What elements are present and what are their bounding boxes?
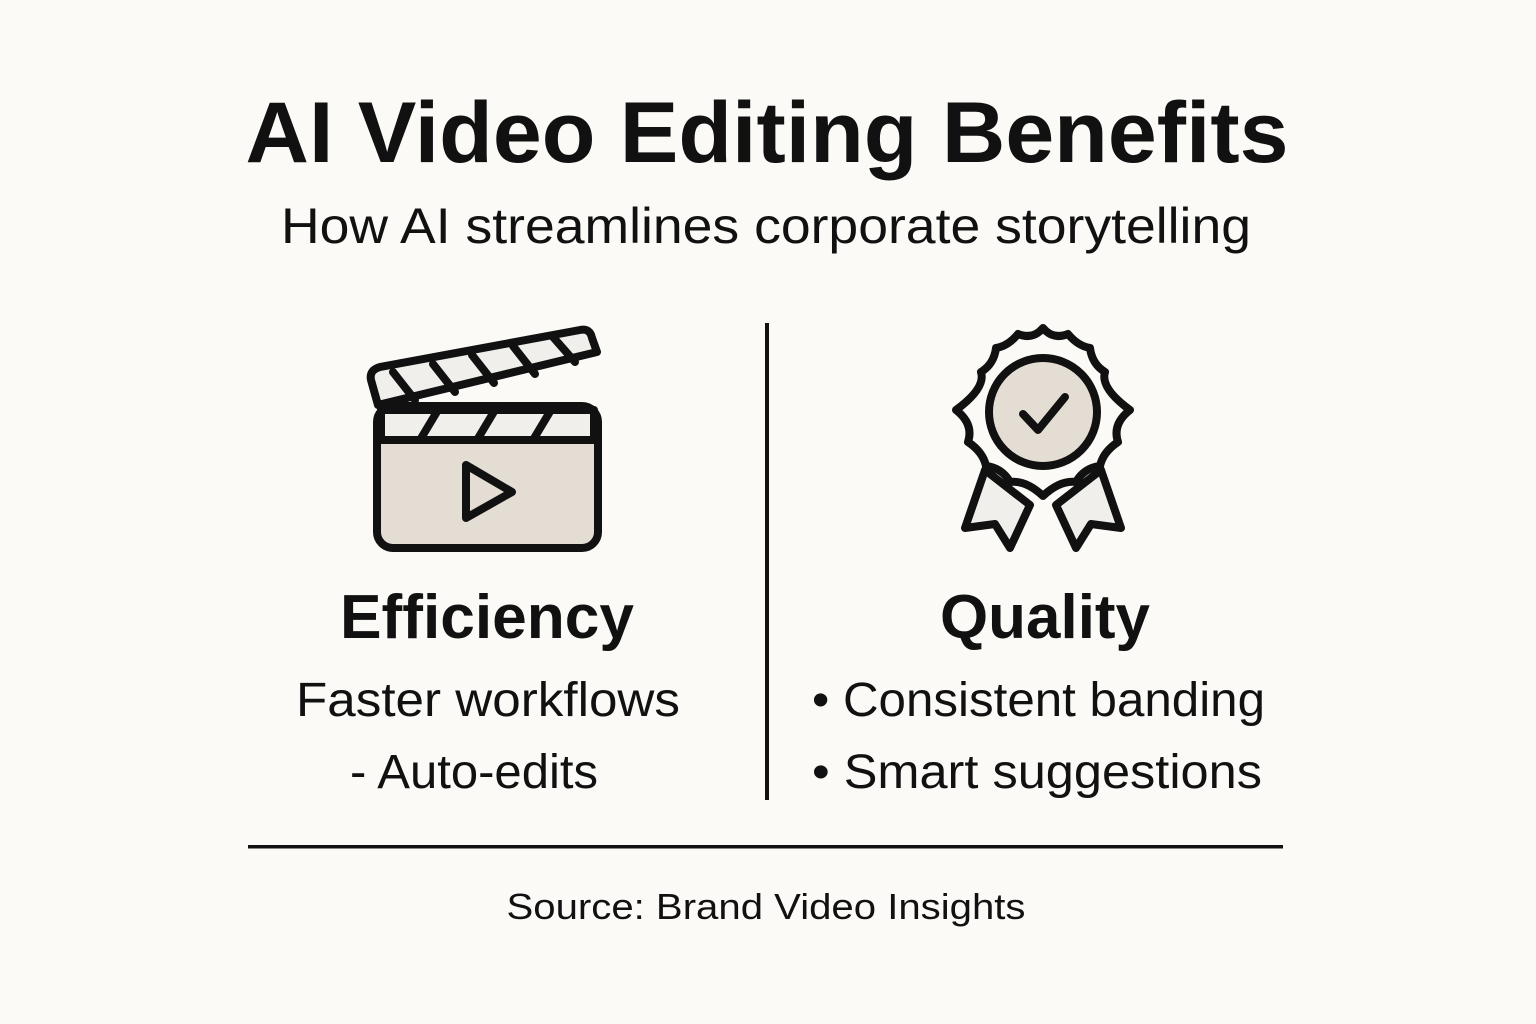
title: AI Video Editing Benefits	[246, 85, 1288, 181]
source: Source: Brand Video Insights	[506, 886, 1026, 927]
subtitle: How AI streamlines corporate storytelling	[281, 198, 1251, 254]
icon: clapperboard	[371, 330, 598, 548]
text: quality items	[812, 674, 1265, 799]
heading: Efficiency: Efficiency	[340, 583, 635, 652]
text: efficiency items: Faster workflows	[296, 674, 680, 727]
text: quality items: • Smart suggestions	[812, 746, 1262, 799]
divider: vertical	[765, 323, 769, 800]
text: quality items: • Consistent banding	[812, 674, 1265, 727]
icon: award badge	[956, 328, 1130, 548]
text: efficiency items: - Auto-edits	[350, 746, 598, 799]
heading: Quality: Quality	[940, 583, 1151, 652]
text: efficiency items	[296, 674, 680, 799]
divider: horizontal	[248, 845, 1283, 848]
